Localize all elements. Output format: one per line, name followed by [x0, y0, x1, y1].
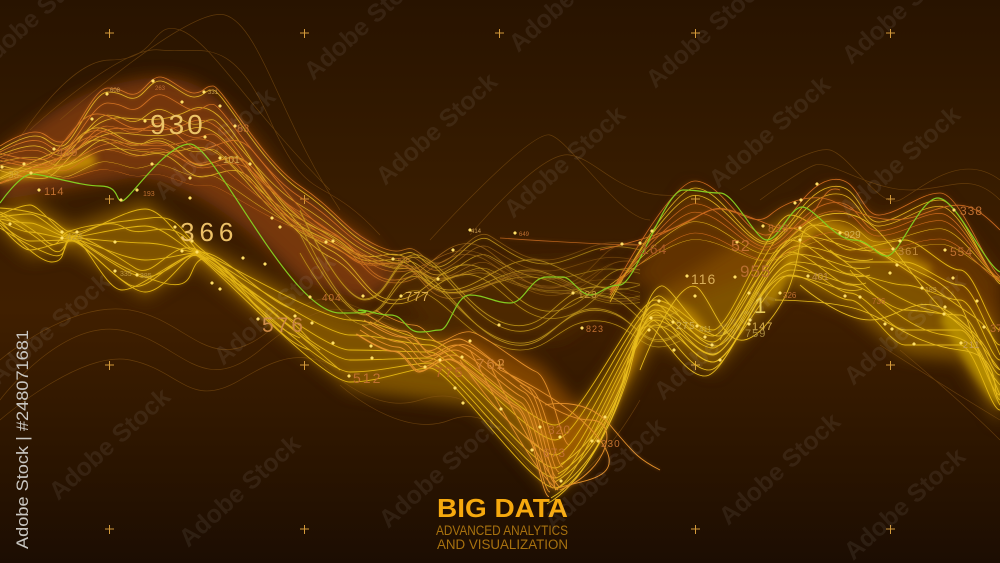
small data numbers: 52	[731, 238, 751, 255]
grid of cross markers	[105, 29, 895, 534]
small data numbers: 673	[543, 446, 566, 460]
small data numbers: 570	[398, 258, 410, 265]
stock watermarks: Adobe Stock	[149, 82, 281, 206]
small data numbers: 424	[66, 232, 83, 243]
small data numbers: 123	[578, 290, 598, 301]
stock watermarks: Adobe Stock	[839, 267, 971, 391]
upper ribbon: orange and gold wave lines	[0, 77, 680, 350]
trough ribbon: bright orange lines	[356, 310, 660, 497]
soft halo copy of the wave lines	[0, 77, 1000, 504]
small data numbers: 736	[872, 297, 886, 306]
lower ribbon: yellow wave lines running to the trough and on to the right edge	[0, 205, 1000, 488]
small data numbers: 777	[405, 289, 430, 304]
small data numbers: 955	[740, 262, 771, 281]
small data numbers: 929	[844, 230, 861, 241]
small data numbers: 338	[960, 204, 983, 218]
stock watermarks: Adobe Stock	[374, 410, 506, 534]
stock watermarks: Adobe Stock	[839, 442, 971, 563]
small data numbers: 193	[143, 191, 155, 198]
small data numbers: 404	[322, 293, 342, 304]
small data numbers: 823	[586, 324, 604, 334]
stock id side text: Adobe Stock | #248071681	[13, 330, 32, 549]
small data numbers: 147	[752, 321, 773, 333]
small data numbers: 211	[963, 340, 980, 350]
small data numbers: 320	[548, 423, 571, 437]
right ribbon: fan of gold and orange lines	[547, 179, 1000, 504]
small data numbers: 775	[435, 364, 464, 380]
small data numbers: 401	[812, 272, 829, 283]
small data numbers: 164	[641, 241, 667, 257]
stock watermarks: Adobe Stock	[499, 100, 631, 224]
small data numbers: 608	[110, 88, 121, 94]
large number 576: 576	[262, 314, 306, 337]
stock watermarks: Adobe Stock	[174, 429, 306, 553]
stock watermarks: Adobe Stock	[371, 67, 503, 191]
wave glow: soft coloured mass behind the lines	[0, 78, 1000, 495]
small data numbers: 649	[519, 232, 530, 238]
small data numbers: 361	[898, 246, 919, 258]
subtitle line 1: ADVANCED ANALYTICS	[436, 523, 568, 538]
small data numbers: 114	[44, 186, 65, 198]
subtitle line 2: AND VISUALIZATION	[437, 537, 568, 552]
small data numbers: 326	[783, 291, 797, 300]
small data numbers: 411	[699, 325, 712, 334]
data point dots	[1, 80, 985, 482]
small data numbers: 189	[925, 287, 937, 294]
small data numbers: 33	[8, 170, 20, 181]
large number 366: 366	[180, 217, 238, 247]
title: BIG DATA: BIG DATA	[437, 493, 568, 523]
small data numbers: 275	[676, 321, 696, 332]
thin orange centre line	[500, 238, 640, 245]
stock watermarks: Adobe Stock	[704, 70, 836, 194]
small data numbers: 83	[237, 123, 249, 135]
small data numbers: 385	[140, 273, 152, 280]
stock watermarks: Adobe Stock	[44, 382, 176, 506]
small data numbers: 828	[768, 223, 789, 235]
stock watermarks: Adobe Stock	[209, 247, 341, 371]
stock watermarks: Adobe Stock	[714, 407, 846, 531]
small data numbers: 230	[601, 439, 621, 450]
stock watermarks: Adobe Stock	[834, 100, 966, 224]
small data numbers: 1	[754, 293, 766, 318]
large number 930: 930	[150, 109, 206, 140]
small data numbers: 116	[691, 271, 716, 287]
small data numbers: 759	[745, 328, 766, 340]
small data numbers: 554	[950, 245, 973, 259]
small data numbers: 762	[476, 356, 507, 373]
small data numbers: 331	[208, 90, 219, 96]
small data numbers: 335	[120, 271, 132, 278]
stock watermarks: Adobe Stock	[649, 282, 781, 406]
small data numbers: 512	[353, 370, 382, 386]
small data numbers: 414	[471, 229, 482, 235]
small data numbers: 101	[223, 155, 240, 166]
stock watermarks: Adobe Stock	[539, 412, 671, 536]
highlighted green data line	[0, 144, 1000, 332]
small data numbers: 439	[57, 147, 78, 159]
small data numbers: 263	[155, 86, 166, 92]
small data numbers	[8, 86, 1000, 460]
